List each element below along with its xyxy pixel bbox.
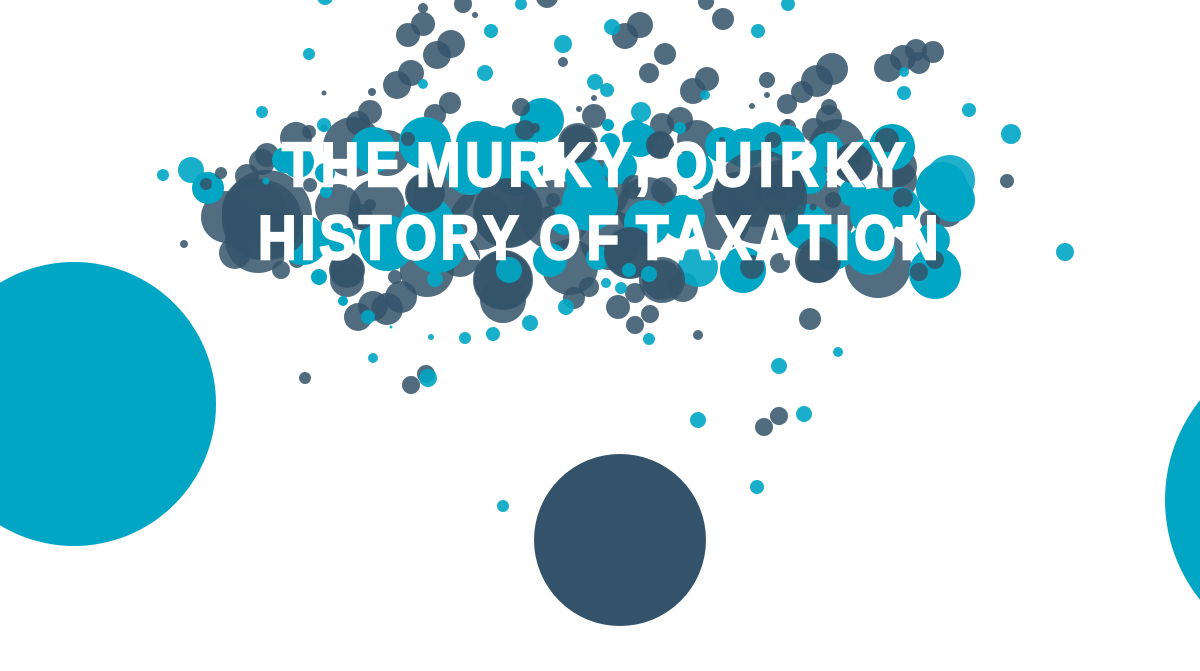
central cluster: slate back layer	[201, 92, 964, 323]
scattered dots: slate	[180, 0, 1014, 436]
central cluster: dark front layer	[200, 95, 944, 310]
large cyan circle right	[1165, 340, 1200, 660]
title: QUIRKY	[666, 131, 912, 200]
scattered dots: cyan	[157, 0, 1074, 512]
title: HISTORY	[258, 204, 523, 273]
large dark circle bottom centre	[534, 454, 706, 626]
central cluster: cyan layer	[192, 98, 975, 306]
title: THE	[282, 131, 407, 200]
large cyan circle left	[0, 262, 216, 546]
title	[258, 131, 943, 273]
title: MURKY,	[416, 131, 655, 200]
title: OF	[539, 204, 625, 273]
title: TAXATION	[636, 204, 943, 273]
